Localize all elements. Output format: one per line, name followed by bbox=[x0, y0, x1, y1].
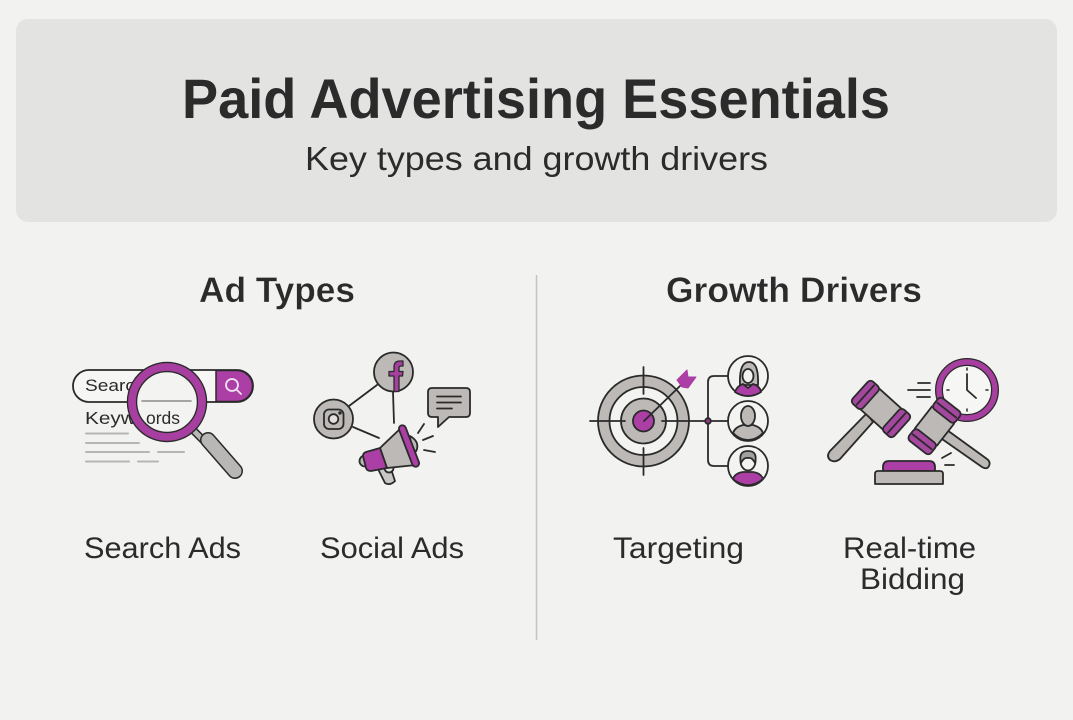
label: Real-time Bidding bbox=[843, 532, 976, 596]
icon: search ads bbox=[73, 367, 253, 471]
label: Real-time Bidding: Bidding bbox=[860, 563, 965, 596]
title: Paid Advertising Essentials bbox=[182, 67, 890, 130]
label: Targeting: Targeting bbox=[613, 532, 744, 565]
icon: search ads: Searc bbox=[85, 377, 135, 395]
icon: social ads bbox=[314, 352, 470, 484]
header panel bbox=[16, 19, 1057, 222]
label: Real-time Bidding: Real-time bbox=[843, 532, 976, 565]
label: Search Ads: Search Ads bbox=[84, 532, 241, 565]
icon: search ads: ords bbox=[146, 408, 180, 428]
label: Social Ads: Social Ads bbox=[320, 532, 464, 565]
heading: Growth Drivers: Growth Drivers bbox=[666, 271, 922, 310]
heading: Ad Types: Ad Types bbox=[199, 271, 355, 310]
icon: search ads: Keyw ords bbox=[85, 408, 182, 428]
icon: real-time bidding bbox=[828, 362, 995, 484]
subtitle: Key types and growth drivers bbox=[305, 140, 768, 177]
icon: targeting bbox=[590, 356, 768, 486]
